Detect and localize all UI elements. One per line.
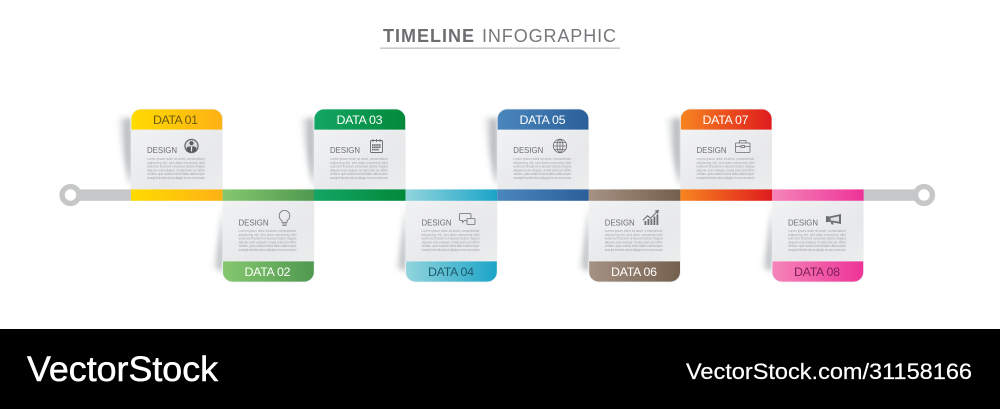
panel: data 06: euismod tincidunt ut laoreet dolore magna [605, 237, 663, 241]
icon: briefcase [736, 141, 750, 152]
icon: globe [553, 139, 567, 153]
panel: data 07 [667, 109, 772, 201]
panel: data 04: suscipit lobortis nisl ut aliquip ex ea commodo [422, 248, 480, 252]
panel: data 05: suscipit lobortis nisl ut aliquip ex ea commodo [513, 176, 571, 180]
panel: data 04: euismod tincidunt ut laoreet dolore magna [422, 237, 480, 241]
timeline bar: left grey segment and node [62, 187, 131, 203]
panel: data 05: aliquam erat volutpat. Ut wisi enim ad minim [513, 168, 572, 172]
title [380, 26, 620, 49]
panel: data 08: aliquam erat volutpat. Ut wisi enim ad minim [788, 240, 846, 244]
footer bar [0, 329, 1000, 409]
panel: data 01: veniam, quis nostrud exerci tation ullamcorper [147, 172, 206, 176]
panel: data 08: suscipit lobortis nisl ut aliquip ex ea commodo [788, 248, 846, 252]
panel: data 08: veniam, quis nostrud exerci tation ullamcorper [788, 244, 847, 248]
panel: data 04: aliquam erat volutpat. Ut wisi enim ad minim [422, 240, 480, 244]
panel: data 03: aliquam erat volutpat. Ut wisi enim ad minim [330, 168, 388, 172]
panel: data 06: veniam, quis nostrud exerci tation ullamcorper [605, 244, 664, 248]
panel: data 03: Lorem ipsum dolor sit amet, consectetuer [330, 157, 389, 161]
panel: data 05: adipiscing elit, sed diam nonummy nibh [513, 161, 571, 165]
panel: data 01 [118, 109, 223, 201]
panel: data 06: DESIGN [605, 218, 635, 227]
panel: data 07: DATA 07 [702, 113, 749, 127]
panel: data 05: DESIGN [513, 146, 543, 155]
footer bar: VectorStock [27, 349, 218, 389]
panel: data 01: aliquam erat volutpat. Ut wisi enim ad minim [147, 168, 205, 172]
panel: data 04: Lorem ipsum dolor sit amet, consectetuer [422, 229, 480, 233]
panel: data 02: aliquam erat volutpat. Ut wisi enim ad minim [238, 240, 297, 244]
panel: data 08: Lorem ipsum dolor sit amet, consectetuer [788, 229, 847, 233]
footer bar: VectorStock.com/31158166 [686, 359, 972, 384]
panel: data 03: veniam, quis nostrud exerci tation ullamcorper [330, 172, 389, 176]
panel: data 02: adipiscing elit, sed diam nonummy nibh [238, 233, 297, 237]
panel: data 07: Lorem ipsum dolor sit amet, consectetuer [696, 157, 755, 161]
panel: data 06: aliquam erat volutpat. Ut wisi enim ad minim [605, 240, 663, 244]
panel: data 02: Lorem ipsum dolor sit amet, consectetuer [238, 229, 297, 233]
panel: data 04: adipiscing elit, sed diam nonummy nibh [422, 233, 480, 237]
panel: data 01: suscipit lobortis nisl ut aliquip ex ea commodo [147, 176, 205, 180]
panel: data 03: DATA 03 [336, 113, 383, 127]
panel: data 03: suscipit lobortis nisl ut aliquip ex ea commodo [330, 176, 388, 180]
icon: megaphone [826, 214, 841, 224]
panel: data 06: DATA 06 [611, 265, 657, 279]
panel: data 01: DATA 01 [153, 113, 198, 127]
icon: chat bubbles [460, 214, 475, 224]
panel: data 08 [762, 189, 864, 282]
panel: data 03: DESIGN [330, 146, 360, 155]
panel: data 05: Lorem ipsum dolor sit amet, consectetuer [513, 157, 572, 161]
panel: data 02: DATA 02 [244, 265, 291, 279]
panel: data 08: DESIGN [788, 218, 818, 227]
icon: growth chart [642, 210, 659, 225]
panel: data 07: adipiscing elit, sed diam nonummy nibh [696, 161, 755, 165]
panel: data 05: euismod tincidunt ut laoreet dolore magna [513, 165, 571, 169]
panel: data 04: DATA 04 [428, 265, 474, 279]
icon: light bulb [279, 210, 290, 226]
icon: calendar [370, 139, 382, 152]
panel: data 02: veniam, quis nostrud exerci tation ullamcorper [238, 244, 297, 248]
panel: data 05: DATA 05 [520, 113, 566, 127]
panel: data 06: Lorem ipsum dolor sit amet, consectetuer [605, 229, 664, 233]
title: TIMELINE [383, 26, 474, 46]
title: INFOGRAPHIC [482, 26, 616, 46]
panel: data 05 [484, 109, 589, 201]
panel: data 02: DESIGN [238, 218, 269, 227]
panel: data 08: DATA 08 [794, 265, 840, 279]
panel: data 04: DESIGN [422, 218, 452, 227]
panel: data 06: adipiscing elit, sed diam nonummy nibh [605, 233, 663, 237]
panel: data 04: veniam, quis nostrud exerci tation ullamcorper [422, 244, 480, 248]
panel: data 01: adipiscing elit, sed diam nonummy nibh [147, 161, 205, 165]
panel: data 07: aliquam erat volutpat. Ut wisi enim ad minim [696, 168, 755, 172]
timeline bar: right grey segment and node [863, 187, 932, 203]
panel: data 01: DESIGN [147, 146, 177, 155]
panel: data 04 [396, 189, 497, 282]
panel: data 06 [579, 189, 680, 282]
icon: person [184, 139, 199, 153]
panel: data 02: suscipit lobortis nisl ut aliquip ex ea commodo [238, 248, 297, 252]
panel: data 01: Lorem ipsum dolor sit amet, consectetuer [147, 157, 206, 161]
panel: data 08: euismod tincidunt ut laoreet dolore magna [788, 237, 846, 241]
panel: data 03: euismod tincidunt ut laoreet dolore magna [330, 165, 388, 169]
panel: data 03 [301, 109, 406, 201]
panel: data 07: DESIGN [696, 146, 727, 155]
panel: data 02 [213, 189, 314, 282]
panel: data 08: adipiscing elit, sed diam nonummy nibh [788, 233, 846, 237]
panel: data 07: veniam, quis nostrud exerci tation ullamcorper [696, 172, 755, 176]
panel: data 01: euismod tincidunt ut laoreet dolore magna [147, 165, 205, 169]
panel: data 06: suscipit lobortis nisl ut aliquip ex ea commodo [605, 248, 663, 252]
panel: data 03: adipiscing elit, sed diam nonummy nibh [330, 161, 388, 165]
panel: data 07: suscipit lobortis nisl ut aliquip ex ea commodo [696, 176, 755, 180]
panel: data 07: euismod tincidunt ut laoreet dolore magna [696, 165, 755, 169]
panel: data 02: euismod tincidunt ut laoreet dolore magna [238, 237, 297, 241]
panel: data 05: veniam, quis nostrud exerci tation ullamcorper [513, 172, 572, 176]
